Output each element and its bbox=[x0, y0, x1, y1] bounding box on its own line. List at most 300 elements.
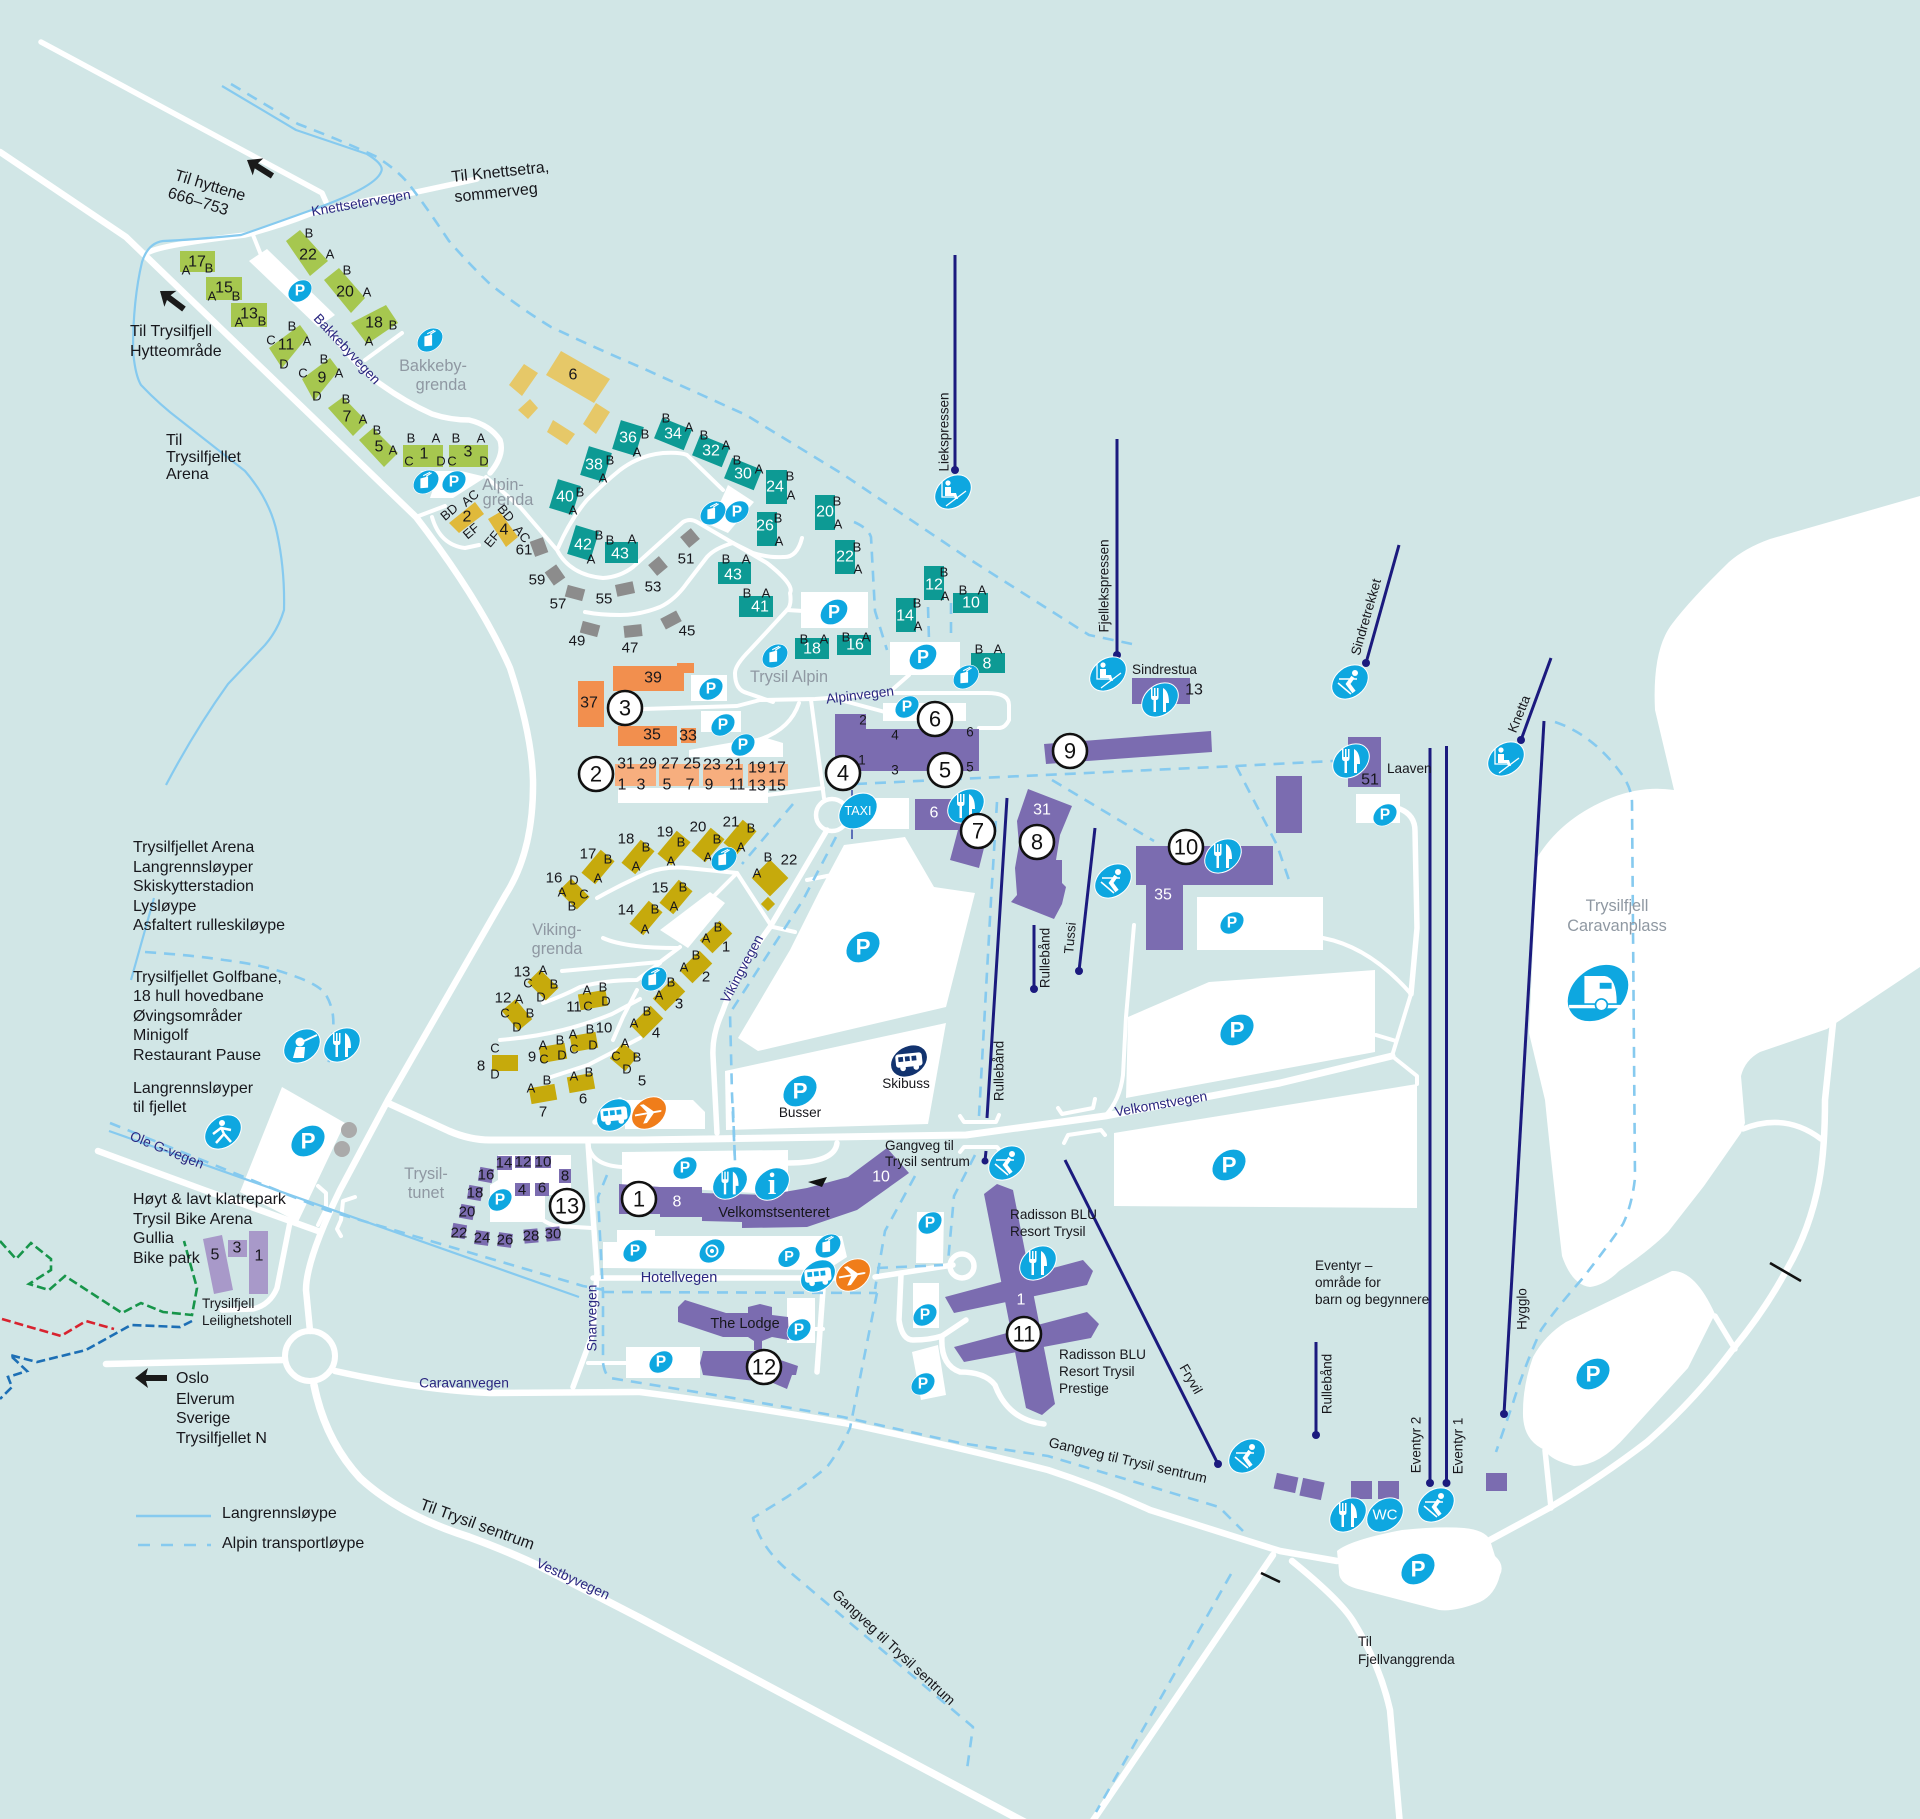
numbered location markers: 1 bbox=[633, 1186, 645, 1212]
Vikinggrenda mustard cabins: A bbox=[570, 1068, 579, 1084]
Bakkebygrenda green cabins: B bbox=[305, 226, 313, 240]
Trysil Alpin teal cabins: 14 bbox=[896, 608, 914, 624]
grey cabins 45–61: 51 bbox=[678, 550, 694, 568]
Bakkebygrenda green cabins: B bbox=[407, 430, 415, 446]
Trysil Alpin teal cabins: B bbox=[722, 552, 730, 566]
Vikinggrenda mustard cabins: C bbox=[539, 1052, 549, 1066]
Vikinggrenda mustard cabins: 19 bbox=[657, 824, 673, 840]
icons: parking: P bbox=[784, 1249, 794, 1265]
Vikinggrenda mustard cabins: 6 bbox=[579, 1090, 587, 1108]
Vikinggrenda mustard cabins: A bbox=[569, 1026, 578, 1042]
Trysil Alpin teal cabins: A bbox=[854, 562, 863, 576]
road names bbox=[128, 187, 1208, 1602]
grey golf markers bbox=[334, 1122, 357, 1157]
bottom parking area bbox=[1337, 1527, 1502, 1610]
icons: parking: P bbox=[920, 1306, 930, 1324]
text block: klatrepark: Trysil Bike Arena bbox=[133, 1211, 253, 1228]
Bakkebygrenda green cabins: B bbox=[389, 318, 397, 332]
Trysil Alpin teal cabins: 43 bbox=[724, 566, 742, 584]
Vikinggrenda mustard cabins: 5 bbox=[638, 1072, 646, 1090]
lift names: Liekspressen bbox=[936, 393, 952, 471]
Vikinggrenda mustard cabins: B bbox=[550, 976, 558, 992]
Trysil Alpin teal cabins: B bbox=[975, 642, 983, 656]
Vikinggrenda mustard cabins: D bbox=[601, 994, 611, 1008]
light orange row cabins: 13 bbox=[748, 778, 766, 794]
text block: Trysilfjellet Arena: Skiskytterstadion bbox=[133, 878, 254, 895]
Trysil Alpin teal cabins: B bbox=[800, 632, 808, 646]
icon: charging parking bbox=[695, 1234, 729, 1268]
area names: grenda bbox=[416, 376, 467, 394]
numbered location markers: 2 bbox=[590, 762, 602, 786]
Trysil Alpin teal cabins: 18 bbox=[803, 640, 821, 658]
Trysil Alpin teal cabins: B bbox=[913, 596, 921, 610]
Vikinggrenda mustard cabins: D bbox=[536, 990, 546, 1004]
icons: drag lifts bbox=[982, 658, 1461, 1529]
Bakkebygrenda green cabins: D bbox=[312, 388, 322, 404]
Vikinggrenda mustard cabins: A bbox=[680, 960, 689, 974]
Trysil Alpin teal cabins: A bbox=[742, 552, 751, 566]
Vikinggrenda mustard cabins: B bbox=[599, 980, 607, 994]
icon: WC bbox=[1360, 1491, 1410, 1539]
text block: destinations: Sverige bbox=[176, 1410, 230, 1427]
central purple buildings: 4 bbox=[891, 728, 899, 742]
Trysil Alpin teal cabins: B bbox=[940, 564, 948, 580]
Leilighetshotell buildings: 5 bbox=[211, 1246, 220, 1264]
Bakkebygrenda green cabins: B bbox=[452, 430, 460, 446]
Bakkebygrenda green cabins: 13 bbox=[240, 306, 258, 322]
Trysil Alpin teal cabins: A bbox=[775, 534, 784, 548]
place labels: Sindrestua bbox=[1132, 662, 1197, 677]
place labels: Gangveg til bbox=[885, 1138, 954, 1153]
icons: parking: P bbox=[718, 716, 728, 734]
Trysil Alpin teal cabins: A bbox=[633, 444, 642, 460]
Trysiltunet buildings: 20 bbox=[459, 1204, 475, 1220]
Vikinggrenda mustard cabins: A bbox=[704, 850, 713, 864]
text block: Trysilfjellet Arena: Lysløype bbox=[133, 898, 197, 915]
Vikinggrenda mustard cabins: C bbox=[500, 1006, 510, 1020]
Trysil Alpin teal cabins: 24 bbox=[766, 478, 784, 496]
text block: Golfbane: Trysilfjellet Golfbane, bbox=[133, 969, 282, 986]
Trysil Alpin teal cabins: A bbox=[914, 618, 923, 634]
Vikinggrenda mustard cabins: 9 bbox=[528, 1048, 536, 1066]
Bakkebygrenda green cabins: B bbox=[343, 262, 351, 278]
text block: Golfbane: Minigolf bbox=[133, 1027, 189, 1044]
light orange row cabins: 21 bbox=[725, 756, 743, 774]
Bakkebygrenda green cabins: B bbox=[205, 260, 213, 276]
place labels: Trysilfjell bbox=[202, 1296, 254, 1311]
place labels: Busser bbox=[779, 1105, 822, 1120]
central purple buildings: 1 bbox=[858, 752, 866, 768]
building 6 light gold group: 6 bbox=[569, 366, 578, 384]
Trysil Alpin teal cabins: A bbox=[978, 582, 987, 598]
icons: parking: P bbox=[1380, 806, 1390, 824]
Vikinggrenda mustard cabins: C bbox=[523, 976, 533, 990]
icons: parking: P bbox=[680, 1159, 690, 1177]
Bakkebygrenda green cabins: C bbox=[404, 454, 414, 468]
grey cabins 45–61: 47 bbox=[622, 640, 638, 656]
text block: Golfbane: Øvingsområder bbox=[133, 1007, 243, 1025]
Trysil Alpin teal cabins: B bbox=[576, 484, 584, 500]
Trysiltunet buildings: 22 bbox=[451, 1224, 467, 1242]
light orange row cabins: 23 bbox=[703, 756, 721, 774]
Vikinggrenda mustard cabins: B bbox=[747, 820, 755, 836]
Vikinggrenda mustard cabins: 16 bbox=[546, 870, 562, 886]
central purple buildings: 31 bbox=[1033, 802, 1051, 818]
Bakkebygrenda green cabins: B bbox=[258, 314, 266, 328]
Trysil Alpin teal cabins: 40 bbox=[556, 488, 574, 506]
place labels: Gangveg til Trysil sentrum bbox=[1047, 1434, 1209, 1486]
Trysiltunet buildings: 18 bbox=[467, 1184, 483, 1202]
place labels: Til Knettsetra, bbox=[451, 159, 550, 186]
bike trails bbox=[0, 1241, 197, 1399]
Trysil Alpin teal cabins: 34 bbox=[664, 426, 682, 442]
icons: parking: P bbox=[1227, 914, 1237, 932]
Radisson Blu buildings: 1 bbox=[1017, 1292, 1026, 1308]
Vikinggrenda mustard cabins: B bbox=[543, 1072, 551, 1088]
Vikinggrenda mustard cabins: C bbox=[583, 998, 593, 1014]
numbered location markers: 12 bbox=[752, 1354, 776, 1380]
icons: parking: P bbox=[828, 602, 840, 622]
lift names: Rullebånd bbox=[1038, 928, 1052, 988]
Trysil Alpin teal cabins: 10 bbox=[962, 594, 980, 612]
grey cabins 45–61: 55 bbox=[596, 590, 612, 608]
Trysil Alpin teal cabins: B bbox=[786, 468, 794, 484]
Trysil Alpin teal cabins: 12 bbox=[925, 576, 943, 594]
direction arrows bbox=[135, 152, 278, 1388]
Trysil Alpin teal cabins: B bbox=[641, 426, 649, 442]
Leilighetshotell buildings bbox=[203, 1231, 268, 1294]
icon: information bbox=[748, 1161, 796, 1207]
icon: WC: WC bbox=[1372, 1506, 1398, 1524]
place labels: Prestige bbox=[1059, 1381, 1109, 1396]
Vikinggrenda mustard cabins: 17 bbox=[580, 846, 596, 862]
Vikinggrenda mustard cabins: B bbox=[764, 850, 772, 864]
icon: cross-country skier bbox=[198, 1108, 248, 1156]
Trysil Alpin teal cabins: B bbox=[606, 452, 614, 468]
Bakkebygrenda green cabins: A bbox=[235, 314, 244, 330]
parking areas bbox=[240, 249, 1417, 1400]
Bakkebygrenda green cabins: A bbox=[359, 412, 368, 426]
Vikinggrenda mustard cabins: B bbox=[526, 1006, 534, 1020]
Bakkebygrenda green cabins: B bbox=[232, 288, 240, 304]
place labels: Skibuss bbox=[882, 1076, 930, 1091]
numbered location markers bbox=[550, 691, 1203, 1384]
text block: Golfbane: Restaurant Pause bbox=[133, 1047, 261, 1064]
Trysiltunet buildings: 6 bbox=[538, 1180, 546, 1196]
Trysil Alpin teal cabins: A bbox=[569, 502, 578, 518]
numbered location markers: 6 bbox=[929, 706, 941, 732]
place labels: Resort Trysil bbox=[1010, 1224, 1086, 1239]
Trysil Alpin teal cabins: 26 bbox=[756, 518, 774, 534]
Vikinggrenda mustard cabins: D bbox=[622, 1062, 632, 1076]
Trysil Alpin teal cabins: B bbox=[774, 510, 782, 526]
Trysil Alpin teal cabins: A bbox=[599, 470, 608, 486]
place labels: 666–753 bbox=[166, 185, 230, 219]
Trysil Alpin teal cabins: A bbox=[762, 586, 771, 600]
Vikinggrenda mustard cabins: 4 bbox=[652, 1024, 660, 1042]
text block: klatrepark: Høyt & lavt klatrepark bbox=[133, 1191, 287, 1208]
road names: Caravanvegen bbox=[419, 1376, 509, 1390]
icons: parking: P bbox=[794, 1321, 804, 1339]
Trysil Alpin teal cabins: B bbox=[733, 452, 741, 468]
Trysiltunet buildings: 28 bbox=[523, 1228, 539, 1244]
road names: Knettsetervegen bbox=[310, 187, 412, 219]
Bakkebygrenda green cabins: A bbox=[335, 366, 344, 380]
Vikinggrenda mustard cabins: 1 bbox=[722, 938, 730, 956]
numbered location markers: 13 bbox=[555, 1194, 579, 1218]
grey cabins 45–61: 59 bbox=[529, 572, 545, 588]
Vikinggrenda mustard cabins: A bbox=[594, 870, 603, 886]
Trysiltunet buildings: 4 bbox=[518, 1182, 526, 1198]
Vikinggrenda mustard cabins: B bbox=[633, 1050, 641, 1064]
Bakkebygrenda green cabins: 15 bbox=[215, 280, 233, 296]
The Lodge building bbox=[678, 1300, 798, 1389]
Trysil Alpin teal cabins: B bbox=[700, 428, 708, 442]
numbered location markers: 8 bbox=[1031, 830, 1043, 854]
place labels: sommerveg bbox=[454, 180, 539, 206]
text block: Golfbane bbox=[133, 969, 282, 1064]
Vikinggrenda mustard cabins: D bbox=[512, 1020, 522, 1034]
place labels: Til Trysil sentrum bbox=[418, 1496, 536, 1554]
Trysiltunet buildings: 24 bbox=[474, 1230, 490, 1246]
lift names: Rullebånd bbox=[1320, 1354, 1334, 1414]
Bakkebygrenda green cabins: D bbox=[436, 454, 446, 468]
Trysil Alpin teal cabins: 32 bbox=[702, 442, 720, 460]
place labels: Radisson BLU bbox=[1010, 1207, 1097, 1222]
Trysil Alpin teal cabins: 16 bbox=[846, 636, 864, 654]
Trysil Alpin teal cabins: A bbox=[628, 532, 637, 546]
Alpingrenda gold cabins: EF bbox=[481, 528, 503, 550]
Bakkebygrenda green cabins: A bbox=[365, 334, 374, 348]
text block: Langrennsløyper bbox=[133, 1080, 254, 1116]
icons: parking: P bbox=[856, 935, 871, 959]
grey cabins 45–61: 49 bbox=[569, 632, 585, 650]
Vikinggrenda mustard cabins: 15 bbox=[652, 880, 668, 896]
Vikinggrenda mustard cabins: A bbox=[539, 1038, 548, 1052]
Bakkebygrenda green cabins: A bbox=[303, 334, 312, 348]
lift names: Eventyr 1 bbox=[1450, 1418, 1466, 1474]
numbered location markers: 9 bbox=[1064, 738, 1076, 764]
icons: parking: P bbox=[495, 1191, 505, 1209]
place labels: Laaven bbox=[1387, 761, 1432, 776]
Vikinggrenda mustard cabins: 10 bbox=[596, 1020, 612, 1036]
icons: parking: P bbox=[793, 1079, 808, 1103]
area names: Viking- bbox=[532, 921, 582, 939]
area names: Trysil- bbox=[404, 1165, 448, 1183]
Alpingrenda gold cabins bbox=[437, 486, 534, 550]
Bakkebygrenda green cabins: 9 bbox=[318, 370, 327, 386]
numbered location markers: 11 bbox=[1013, 1322, 1035, 1346]
Trysil Alpin teal cabins: A bbox=[994, 642, 1003, 656]
icons: parking: P bbox=[1230, 1018, 1245, 1042]
Bakkebygrenda green cabins: A bbox=[389, 442, 398, 458]
Vikinggrenda mustard cabins: B bbox=[667, 974, 675, 990]
Trysil Alpin teal cabins: 43 bbox=[611, 546, 629, 562]
light orange row cabins: 19 bbox=[748, 760, 766, 776]
Vikinggrenda mustard cabins: 13 bbox=[514, 964, 530, 980]
grey cabins 45–61: 45 bbox=[679, 622, 695, 640]
Trysil Alpin teal cabins: A bbox=[685, 420, 694, 434]
orange apartments: 33 bbox=[679, 728, 697, 744]
Vikinggrenda mustard cabins: 12 bbox=[495, 990, 511, 1006]
Vikinggrenda mustard cabins: 3 bbox=[675, 996, 683, 1012]
icons: parking: P bbox=[1411, 1557, 1426, 1581]
Bakkebygrenda green cabins: 5 bbox=[375, 438, 384, 456]
Alpingrenda gold cabins: EF bbox=[460, 520, 482, 542]
place labels: barn og begynnere bbox=[1315, 1292, 1429, 1307]
place labels: Trysilfjellet bbox=[166, 449, 242, 466]
Vikinggrenda mustard cabins: A bbox=[539, 962, 548, 978]
Vikinggrenda mustard cabins: A bbox=[667, 854, 676, 868]
Velkomstsenteret building: 8 bbox=[673, 1194, 682, 1210]
light orange row cabins: 5 bbox=[663, 776, 672, 794]
icons: parking: P bbox=[656, 1353, 666, 1371]
Vikinggrenda mustard cabins: B bbox=[604, 852, 612, 866]
cross-country trails bbox=[109, 86, 579, 1297]
Bakkebygrenda green cabins: 1 bbox=[420, 446, 429, 462]
Bakkebygrenda green cabins: A bbox=[363, 284, 372, 300]
place labels: Til bbox=[1358, 1634, 1372, 1649]
central purple buildings: 51 bbox=[1361, 772, 1379, 788]
Vikinggrenda mustard cabins: B bbox=[642, 840, 650, 854]
numbered location markers: 5 bbox=[939, 758, 951, 782]
icons: parking: P bbox=[1222, 1153, 1237, 1177]
central purple buildings: 3 bbox=[891, 762, 899, 778]
lift names: Knetta bbox=[1505, 693, 1533, 735]
Vikinggrenda mustard cabins: C bbox=[611, 1048, 621, 1064]
Vikinggrenda mustard cabins: C bbox=[579, 886, 589, 902]
Velkomstsenteret building bbox=[619, 1148, 909, 1228]
place labels: Til hyttene bbox=[173, 167, 248, 205]
Vikinggrenda mustard cabins: B bbox=[586, 1022, 594, 1036]
Vikinggrenda mustard cabins: B bbox=[677, 834, 685, 850]
icons: shops bbox=[409, 323, 983, 1263]
alpine transport trails bbox=[110, 84, 1635, 1812]
caravan site white area bbox=[1529, 496, 1920, 1287]
icon: ski bus bbox=[885, 1039, 933, 1083]
Trysil Alpin teal cabins: B bbox=[662, 410, 670, 426]
Trysil Alpin teal cabins: A bbox=[722, 438, 731, 452]
Vikinggrenda mustard cabins: B bbox=[585, 1064, 593, 1080]
Vikinggrenda mustard cabins: C bbox=[490, 1040, 500, 1056]
Vikinggrenda mustard cabins: A bbox=[737, 840, 746, 854]
Trysil Alpin teal cabins: A bbox=[941, 588, 950, 604]
lift names: Fjellekspressen bbox=[1096, 539, 1112, 633]
place labels: Hytteområde bbox=[130, 342, 222, 360]
text block: Golfbane: 18 hull hovedbane bbox=[133, 988, 264, 1005]
Bakkebygrenda green cabins: C bbox=[447, 454, 457, 468]
lift names: Eventyr 2 bbox=[1408, 1417, 1424, 1473]
lower parking area bbox=[1523, 1271, 1715, 1466]
Trysil Alpin teal cabins: A bbox=[755, 462, 764, 476]
Alpingrenda gold cabins: AC bbox=[458, 486, 482, 510]
Alpingrenda gold cabins: BD bbox=[494, 501, 518, 525]
Vikinggrenda mustard cabins: D bbox=[569, 872, 579, 888]
small purple buildings at Eventyr bbox=[1274, 1473, 1507, 1500]
Vikinggrenda mustard cabins: D bbox=[557, 1048, 567, 1062]
central purple buildings: 35 bbox=[1154, 886, 1172, 904]
orange apartments: 35 bbox=[643, 726, 661, 744]
orange apartments: 39 bbox=[644, 670, 662, 686]
Velkomstsenteret building: Velkomstsenteret bbox=[718, 1205, 830, 1221]
icons: parking: P bbox=[738, 736, 748, 754]
Bakkebygrenda green cabins bbox=[180, 226, 489, 468]
Trysiltunet buildings: 30 bbox=[545, 1226, 561, 1242]
text block: Trysilfjellet Arena: Trysilfjellet Arena bbox=[133, 839, 254, 856]
grey cabins 45–61 bbox=[516, 528, 700, 656]
Vikinggrenda mustard cabins: A bbox=[527, 1080, 536, 1096]
Trysil Alpin teal cabins: 38 bbox=[585, 456, 603, 474]
Bakkebygrenda green cabins: B bbox=[320, 352, 328, 366]
Bakkebygrenda green cabins: B bbox=[342, 392, 350, 406]
road end ticks bbox=[1261, 1263, 1801, 1582]
text block: destinations bbox=[176, 1370, 267, 1447]
orange apartments bbox=[578, 663, 697, 746]
road names: Vestbyvegen bbox=[534, 1556, 612, 1602]
Bakkebygrenda green cabins: 7 bbox=[343, 408, 352, 426]
Vikinggrenda mustard cabins: A bbox=[641, 922, 650, 936]
Radisson Blu buildings bbox=[945, 1184, 1099, 1415]
central purple buildings: 6 bbox=[930, 804, 939, 822]
icon: taxi bbox=[832, 786, 884, 836]
light orange row cabins: 7 bbox=[686, 776, 695, 794]
place labels: Til bbox=[166, 432, 182, 449]
Vikinggrenda mustard cabins: 20 bbox=[690, 818, 706, 836]
Trysil Alpin teal cabins: 42 bbox=[574, 536, 592, 554]
icons: parking: P bbox=[918, 1375, 928, 1393]
Trysiltunet buildings: 16 bbox=[478, 1166, 494, 1184]
place labels: Arena bbox=[166, 466, 209, 483]
light orange row cabins: 17 bbox=[768, 760, 786, 776]
icons: parking: P bbox=[301, 1129, 316, 1153]
Vikinggrenda mustard cabins: B bbox=[713, 832, 721, 846]
road names: Bakkebyvegen bbox=[311, 311, 383, 387]
central purple buildings bbox=[835, 678, 1381, 950]
Alpingrenda gold cabins: BD bbox=[437, 500, 461, 524]
Velkomstsenteret building: 10 bbox=[872, 1168, 890, 1186]
Vikinggrenda mustard cabins: B bbox=[568, 898, 576, 914]
Vikinggrenda mustard cabins: A bbox=[583, 982, 592, 998]
Trysil Alpin teal cabins: B bbox=[743, 586, 751, 600]
Trysil Alpin teal cabins: 20 bbox=[816, 504, 834, 520]
Vikinggrenda mustard cabins: B bbox=[679, 880, 687, 894]
icon: information: i bbox=[768, 1167, 776, 1201]
Vikinggrenda mustard cabins: A bbox=[630, 1016, 639, 1030]
icons: parking: P bbox=[902, 698, 912, 716]
Vikinggrenda mustard cabins: A bbox=[753, 866, 762, 880]
text block: klatrepark: Gullia bbox=[133, 1230, 174, 1247]
light orange row cabins: 25 bbox=[683, 756, 701, 772]
Trysil Alpin teal cabins: B bbox=[833, 494, 841, 508]
icons: parking: P bbox=[630, 1242, 640, 1260]
Bakkebygrenda green cabins: B bbox=[373, 422, 381, 438]
area names: Caravanplass bbox=[1567, 917, 1667, 935]
icons: parking bbox=[284, 275, 1616, 1591]
Bakkebygrenda green cabins: A bbox=[326, 246, 335, 262]
Trysil Alpin teal cabins: 8 bbox=[983, 656, 992, 672]
Bakkebygrenda green cabins: A bbox=[208, 288, 217, 304]
grey cabins 45–61: 61 bbox=[516, 542, 532, 558]
text block: destinations: Oslo bbox=[176, 1370, 209, 1387]
Vikinggrenda mustard cabins: A bbox=[702, 930, 711, 946]
text block: Langrennsløyper: Langrennsløyper bbox=[133, 1080, 254, 1097]
Trysiltunet buildings: 10 bbox=[535, 1154, 551, 1170]
Trysil Alpin teal cabins: B bbox=[959, 582, 967, 598]
Vikinggrenda mustard cabins: 18 bbox=[618, 830, 634, 848]
text block: Trysilfjellet Arena bbox=[133, 839, 285, 934]
Trysiltunet buildings: 8 bbox=[561, 1168, 569, 1184]
Bakkebygrenda green cabins: 18 bbox=[365, 314, 383, 332]
